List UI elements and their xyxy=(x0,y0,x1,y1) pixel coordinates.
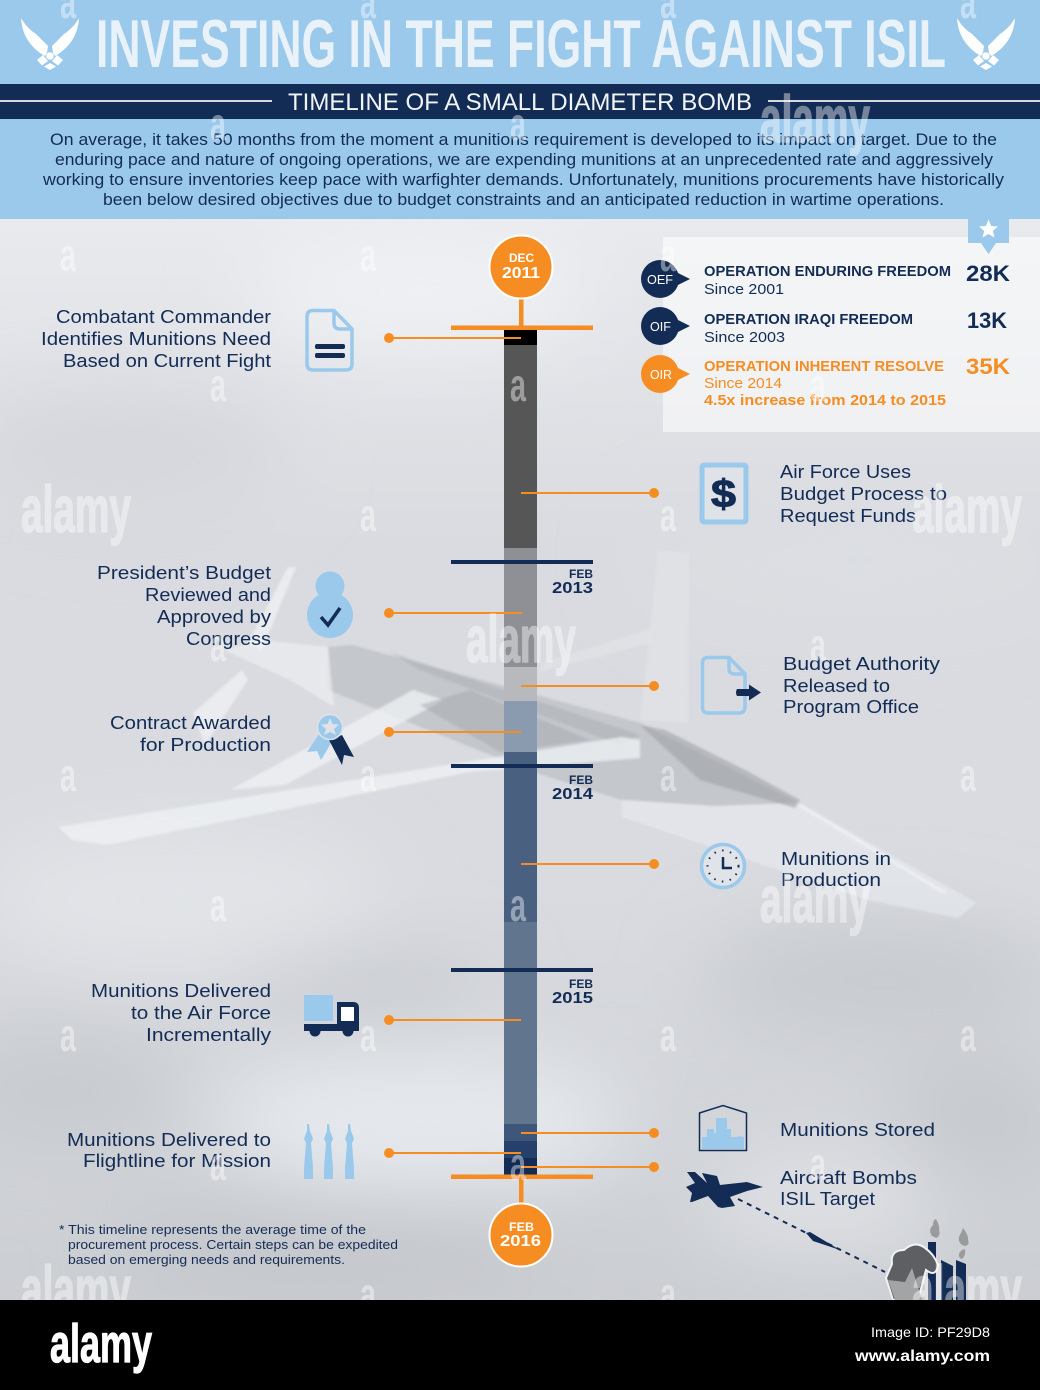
footnote xyxy=(59,1223,398,1267)
step: contract awarded xyxy=(110,712,271,755)
stock watermarks: a xyxy=(210,1138,226,1190)
stock watermarks: a xyxy=(60,749,76,801)
end marker: Feb 2016: FEB xyxy=(509,1222,534,1234)
stock watermarks: alamy xyxy=(760,862,870,936)
operation inherent resolve: 4.5x increase from 2014 to 2015 xyxy=(704,392,946,409)
stock watermarks: a xyxy=(360,749,376,801)
connectors xyxy=(384,333,659,1172)
operation iraqi freedom xyxy=(641,307,1007,346)
stock watermarks: a xyxy=(360,1009,376,1061)
stock watermarks: a xyxy=(60,229,76,281)
stock watermarks: a xyxy=(360,229,376,281)
step: munitions stored: Munitions Stored xyxy=(780,1119,935,1140)
step: president's budget: Approved by xyxy=(157,606,272,627)
step: combatant commander: Based on Current Fight xyxy=(63,350,271,371)
step: budget authority: Program Office xyxy=(783,696,919,717)
stock watermarks: a xyxy=(510,879,526,931)
step: aircraft bombs target: Aircraft Bombs xyxy=(780,1167,917,1188)
stock watermarks: a xyxy=(660,489,676,541)
icon: target buildings and explosion xyxy=(886,1219,969,1302)
step: delivered to flightline: Munitions Delivered to xyxy=(67,1129,271,1150)
step: aircraft bombs target xyxy=(780,1167,917,1209)
icon: warehouse xyxy=(700,1106,746,1150)
stock watermarks: a xyxy=(510,359,526,411)
icon: falling bomb with dashed path xyxy=(738,1199,885,1272)
operation enduring freedom: OEF xyxy=(647,272,673,287)
end marker: Feb 2016 xyxy=(451,1174,593,1266)
stock watermarks: a xyxy=(810,359,826,411)
panel: operations xyxy=(641,219,1040,432)
step: munitions delivered: Munitions Delivered xyxy=(91,980,271,1001)
stock watermarks: a xyxy=(510,98,526,150)
step: combatant commander: Combatant Commander xyxy=(56,306,271,327)
subtitle band xyxy=(0,84,1040,119)
icon: award ribbon xyxy=(307,714,354,765)
stock watermarks: a xyxy=(960,749,976,801)
subtitle band: TIMELINE OF A SMALL DIAMETER BOMB xyxy=(288,89,752,116)
stock footer bar: alamy xyxy=(50,1314,152,1374)
step: aircraft bombs target: ISIL Target xyxy=(780,1188,875,1209)
icon: clock xyxy=(702,844,744,888)
footnote: based on emerging needs and requirements. xyxy=(68,1253,345,1267)
stock watermarks: a xyxy=(810,619,826,671)
step: delivered to flightline xyxy=(67,1129,271,1171)
step: munitions delivered xyxy=(91,980,272,1045)
stock watermarks: alamy xyxy=(466,602,576,676)
date marker: Feb 2013: 2013 xyxy=(552,580,593,597)
start marker: Dec 2011 xyxy=(451,236,593,330)
step: combatant commander xyxy=(41,306,271,371)
date marker: Feb 2015 xyxy=(451,968,593,1007)
stock watermarks: a xyxy=(660,1268,676,1320)
date marker: Feb 2015: FEB xyxy=(569,979,593,991)
icon: fighter jet xyxy=(686,1172,763,1208)
stock watermarks: a xyxy=(810,1138,826,1190)
step: munitions in production: Munitions in xyxy=(781,848,891,869)
operation inherent resolve: OPERATION INHERENT RESOLVE xyxy=(704,358,944,375)
stock watermarks: alamy xyxy=(21,472,131,546)
stock watermarks: a xyxy=(660,229,676,281)
background: guided bomb photograph xyxy=(58,550,977,918)
operation iraqi freedom: Since 2003 xyxy=(704,329,785,346)
operation enduring freedom: OPERATION ENDURING FREEDOM xyxy=(704,263,951,280)
step: budget process: Request Funds xyxy=(780,505,916,526)
operation enduring freedom: Since 2001 xyxy=(704,281,784,298)
date marker: Feb 2013 xyxy=(451,560,593,597)
icon: air force wings left xyxy=(21,18,79,70)
end marker: Feb 2016: 2016 xyxy=(500,1233,541,1250)
date marker: Feb 2014: 2014 xyxy=(552,786,593,803)
stock watermarks: a xyxy=(210,879,226,931)
stock watermarks: a xyxy=(210,359,226,411)
stock footer bar xyxy=(0,1300,1040,1390)
icon: document with arrow xyxy=(702,658,761,713)
step: president's budget: President’s Budget xyxy=(97,562,271,583)
stock watermarks: a xyxy=(960,1009,976,1061)
operation iraqi freedom: 13K xyxy=(967,308,1007,333)
timeline bar xyxy=(504,330,537,1175)
stock watermarks: a xyxy=(210,98,226,150)
footnote: procurement process. Certain steps can be expedited xyxy=(68,1238,398,1252)
operation inherent resolve xyxy=(641,354,1010,409)
stock watermarks: a xyxy=(660,749,676,801)
stock watermarks: alamy xyxy=(21,1252,131,1326)
operation inherent resolve: OIR xyxy=(650,367,672,382)
operation iraqi freedom: OIF xyxy=(650,319,671,334)
intro panel xyxy=(0,119,1040,219)
stock watermarks: a xyxy=(60,1009,76,1061)
icon: dollar: $ xyxy=(711,473,736,516)
step: budget process: Air Force Uses xyxy=(780,461,911,482)
step: munitions delivered: to the Air Force xyxy=(131,1002,271,1023)
date marker: Feb 2014: FEB xyxy=(569,775,593,787)
intro panel: On average, it takes 50 months from the moment a munitions requirement is developed to its impact on target. Due to the xyxy=(50,130,997,149)
step: budget process: Budget Process to xyxy=(780,483,947,504)
date marker: Feb 2013: FEB xyxy=(569,569,593,581)
step: president's budget: Congress xyxy=(186,628,271,649)
intro panel: been below desired objectives due to budget constraints and an anticipated reduction in wartime operations. xyxy=(103,190,944,209)
step: munitions in production: Production xyxy=(781,869,881,890)
background: cloudy sky xyxy=(0,219,1040,1300)
icon: dollar xyxy=(702,465,746,522)
step: budget authority: Budget Authority xyxy=(783,653,941,674)
icon: document xyxy=(307,310,352,370)
stock watermarks: a xyxy=(360,489,376,541)
operation iraqi freedom: OPERATION IRAQI FREEDOM xyxy=(704,311,913,328)
step: contract awarded: Contract Awarded xyxy=(110,712,271,733)
icon: air force wings right xyxy=(957,18,1015,70)
operation enduring freedom xyxy=(641,260,1010,298)
footnote: * This timeline represents the average time of the xyxy=(59,1223,366,1237)
stock watermarks: a xyxy=(510,1138,526,1190)
start marker: Dec 2011: DEC xyxy=(509,253,534,265)
stock watermarks: a xyxy=(210,619,226,671)
step: delivered to flightline: Flightline for Mission xyxy=(83,1150,271,1171)
step: contract awarded: for Production xyxy=(140,734,271,755)
stock footer bar: Image ID: PF29D8 xyxy=(871,1324,990,1340)
stock footer bar: www.alamy.com xyxy=(854,1348,990,1365)
step: combatant commander: Identifies Munitions Need xyxy=(41,328,271,349)
stock watermarks: alamy xyxy=(760,82,870,156)
step: munitions in production xyxy=(781,848,891,890)
step: budget process xyxy=(780,461,947,526)
step: budget authority: Released to xyxy=(783,675,890,696)
stock watermarks: a xyxy=(360,1268,376,1320)
operation inherent resolve: 35K xyxy=(966,354,1010,379)
stock watermarks: a xyxy=(660,1009,676,1061)
date marker: Feb 2015: 2015 xyxy=(552,990,593,1007)
header band xyxy=(0,0,1040,84)
icon: star badge xyxy=(968,219,1009,254)
step: president's budget: Reviewed and xyxy=(145,584,271,605)
icon: delivery truck xyxy=(304,995,359,1036)
icon: three munitions xyxy=(304,1124,354,1179)
date marker: Feb 2014 xyxy=(451,764,593,803)
intro panel: working to ensure inventories keep pace with warfighter demands. Unfortunately, munitions procurements have historically xyxy=(42,170,1005,189)
step: budget authority xyxy=(783,653,941,717)
icon: person with check xyxy=(307,572,353,638)
step: president's budget xyxy=(97,562,272,649)
operation enduring freedom: 28K xyxy=(966,261,1010,286)
intro panel: enduring pace and nature of ongoing operations, we are expending munitions at an unprecedented rate and aggressively xyxy=(55,150,994,169)
start marker: Dec 2011: 2011 xyxy=(502,265,540,282)
step: munitions delivered: Incrementally xyxy=(146,1024,272,1045)
operation inherent resolve: Since 2014 xyxy=(704,375,782,392)
